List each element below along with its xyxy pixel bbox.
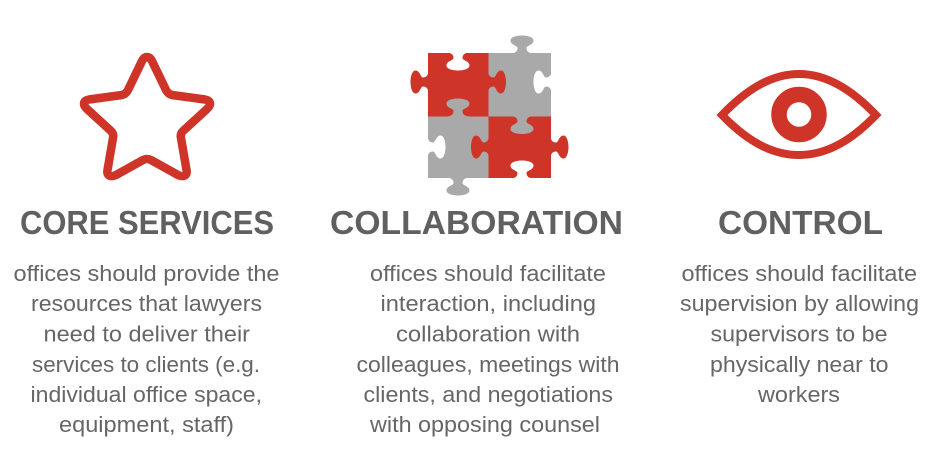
text block: core services description: equipment, staff) (59, 412, 234, 437)
text block: collaboration description: interaction, including (380, 291, 596, 316)
panel: control (680, 74, 919, 407)
text block: core services description: need to deliver their (44, 322, 250, 346)
text block: control description: supervisors to be (710, 322, 888, 346)
panel: core services (14, 57, 280, 437)
heading: control: CONTROL (718, 204, 883, 241)
text block: collaboration description: colleagues, meetings with (356, 352, 620, 377)
text block: core services description (14, 261, 280, 437)
text block: control description (680, 261, 919, 407)
text block: control description: workers (757, 382, 840, 407)
text block: core services description: services to clients (e.g. (32, 352, 260, 377)
text block: collaboration description: offices should facilitate (370, 261, 606, 286)
text block: core services description: resources that lawyers (31, 291, 262, 316)
text block: collaboration description: with opposing counsel (369, 412, 600, 437)
text block: control description: physically near to (710, 352, 888, 377)
icon: star (84, 57, 210, 176)
text block: collaboration description: collaboration with (396, 322, 580, 346)
text block: core services description: offices should provide the (14, 261, 280, 286)
text block: collaboration description: clients, and negotiations (364, 382, 613, 407)
panel: collaboration (330, 36, 623, 437)
icon: eye (722, 74, 876, 155)
text block: collaboration description (356, 261, 620, 437)
text block: control description: supervision by allowing (680, 291, 919, 316)
heading: core services: CORE SERVICES (20, 204, 274, 241)
text block: core services description: individual office space, (30, 382, 262, 407)
heading: collaboration: COLLABORATION (330, 204, 623, 241)
text block: control description: offices should facilitate (682, 261, 917, 286)
icon: puzzle (410, 36, 568, 196)
